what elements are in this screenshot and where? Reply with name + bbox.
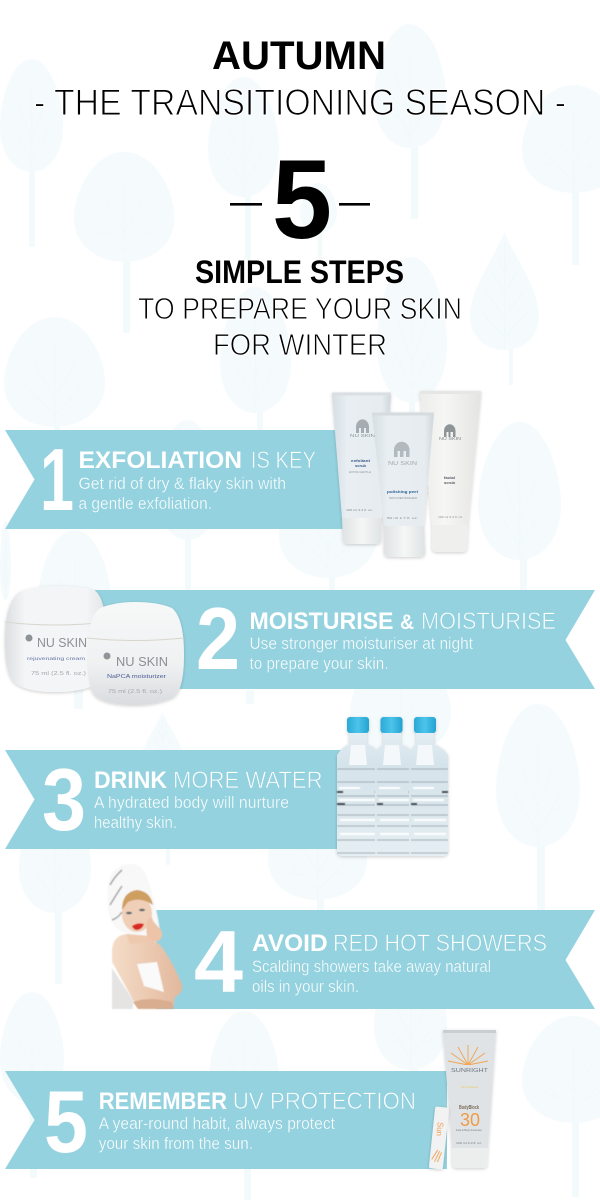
- product: sunscreen tube: 30: [460, 1110, 480, 1130]
- tube: facial scrub: NU SKIN: [439, 436, 461, 441]
- product: sunscreen tube: BodyBlock: [459, 1105, 479, 1111]
- step 4 heading: [252, 930, 547, 957]
- bottle 1: [337, 717, 381, 856]
- jar: NaPCA moisturizer: NU SKIN: [116, 654, 168, 669]
- jar: rejuvenating cream: 75 ml (2.5 fl. oz.): [31, 671, 86, 677]
- ribbon 3: [5, 750, 345, 849]
- number 2: 2: [196, 589, 240, 688]
- step 2 heading: MOISTURISE: [421, 608, 556, 635]
- step 3 heading: MORE WATER: [173, 767, 323, 794]
- step 4 description: Scalding showers take away natural: [252, 957, 491, 976]
- tube: exfoliant scrub: EXTRA GENTLE: [349, 470, 371, 474]
- big number 5 with side dashes: 5: [272, 137, 332, 262]
- tube: facial scrub: scrub: [444, 481, 455, 485]
- product: sunscreen tube: 100 ml 3.4 fl. oz.: [456, 1141, 482, 1145]
- tube: exfoliant scrub: 100 ml 3.4 fl. oz.: [346, 508, 373, 512]
- step 5 heading: REMEMBER: [99, 1088, 227, 1115]
- step 1 heading: EXFOLIATION: [78, 447, 242, 474]
- tube: polishing peel: polishing peel: [387, 490, 418, 494]
- product: sunscreen tube: SUNRIGHT: [451, 1068, 489, 1074]
- tube: exfoliant scrub: scrub: [355, 464, 366, 468]
- tube: exfoliant scrub: NU SKIN: [350, 433, 375, 438]
- step 1 description: [78, 474, 286, 513]
- tube: facial scrub: [420, 391, 481, 552]
- step 3 description: [94, 793, 289, 832]
- bottle 2: [375, 717, 415, 856]
- subtitle: the transitioning season: - THE TRANSITIONING SEASON -: [34, 82, 566, 123]
- number 1: 1: [40, 430, 74, 529]
- heading: to prepare your skin: TO PREPARE YOUR SKIN: [138, 291, 462, 326]
- product: sunscreen tube: [443, 1030, 496, 1168]
- step 2 description: to prepare your skin.: [250, 654, 388, 673]
- panel: step 2 moisturise: [5, 586, 595, 705]
- tube: facial scrub: facial: [444, 476, 455, 480]
- panel: step 5 uv protection: [5, 1030, 496, 1171]
- step 5 description: A year-round habit, always protect: [99, 1114, 335, 1133]
- step 4 description: [252, 957, 491, 996]
- step 5 description: your skin from the sun.: [99, 1134, 253, 1153]
- panel: step 3 drink more water: [5, 717, 448, 856]
- ribbon 2: [95, 590, 595, 689]
- step 2 description: [250, 634, 473, 673]
- ribbon 1: [5, 430, 345, 529]
- tube: polishing peel: 50 ml 1.7 fl. oz.: [387, 516, 418, 520]
- tube: exfoliant scrub: [332, 392, 391, 544]
- jar: NaPCA moisturizer: NaPCA moisturizer: [107, 674, 166, 680]
- product: two Nu Skin cream jars: [5, 586, 184, 705]
- product: sunscreen tube: with Tocotrienol: [461, 1085, 478, 1089]
- product: three Nu Skin tubes: [332, 391, 481, 557]
- step 2 description: Use stronger moisturiser at night: [250, 634, 473, 653]
- step 3 heading: [94, 767, 323, 794]
- tube: facial scrub: 100 ml 3.4 fl. oz.: [438, 515, 463, 519]
- product: lip balm stick: [429, 1106, 449, 1170]
- number 4: 4: [194, 912, 243, 1011]
- panel: step 4 avoid red hot showers: [108, 864, 595, 1011]
- step 3 description: healthy skin.: [94, 813, 177, 832]
- jar: NaPCA moisturizer: [87, 602, 184, 705]
- step 4 heading: RED HOT SHOWERS: [333, 930, 547, 957]
- number 5: 5: [44, 1072, 88, 1171]
- step 4 description: oils in your skin.: [252, 977, 359, 996]
- panel: step 1 exfoliation: [5, 391, 481, 557]
- ribbon 4: [156, 910, 595, 1009]
- jar: rejuvenating cream: [5, 586, 107, 692]
- product: lip balm stick: Sun: [434, 1122, 445, 1136]
- heading: for winter: FOR WINTER: [213, 327, 387, 362]
- step 5 heading: UV PROTECTION: [233, 1088, 416, 1115]
- tube: exfoliant scrub: exfoliant: [351, 459, 371, 463]
- jar: rejuvenating cream: NU SKIN: [37, 636, 87, 650]
- product: three water bottles: [337, 717, 448, 856]
- step 2 heading: MOISTURISE: [250, 608, 394, 635]
- heading: simple steps: SIMPLE STEPS: [195, 254, 404, 290]
- step 1 description: a gentle exfoliation.: [78, 494, 212, 513]
- tube: polishing peel: [372, 412, 434, 557]
- tube: polishing peel: SKIN REFINISHER: [389, 496, 418, 500]
- photo: woman in towel: [108, 864, 182, 1009]
- number 3: 3: [42, 750, 86, 849]
- step 4 heading: AVOID: [252, 930, 328, 957]
- step 1 heading: IS KEY: [251, 447, 316, 474]
- title: Autumn: AUTUMN: [212, 34, 386, 78]
- tube: polishing peel: NU SKIN: [388, 461, 417, 467]
- step 5 heading: [99, 1088, 416, 1115]
- jar: NaPCA moisturizer: 75 ml (2.5 fl. oz.): [108, 689, 162, 695]
- ribbon 5: [5, 1071, 447, 1169]
- big number 5 with side dashes: [230, 137, 370, 262]
- jar: rejuvenating cream: rejuvenating cream: [27, 656, 85, 662]
- step 3 description: A hydrated body will nurture: [94, 793, 289, 812]
- step 5 description: [99, 1114, 335, 1153]
- step 3 heading: DRINK: [94, 767, 167, 794]
- step 2 heading: &: [400, 611, 414, 634]
- bottle 3: [409, 717, 448, 856]
- product: sunscreen tube: Face & Body Sunscreen: [456, 1128, 482, 1132]
- step 2 heading: [250, 608, 556, 635]
- step 1 description: Get rid of dry & flaky skin with: [78, 474, 286, 493]
- step 1 heading: [78, 447, 316, 474]
